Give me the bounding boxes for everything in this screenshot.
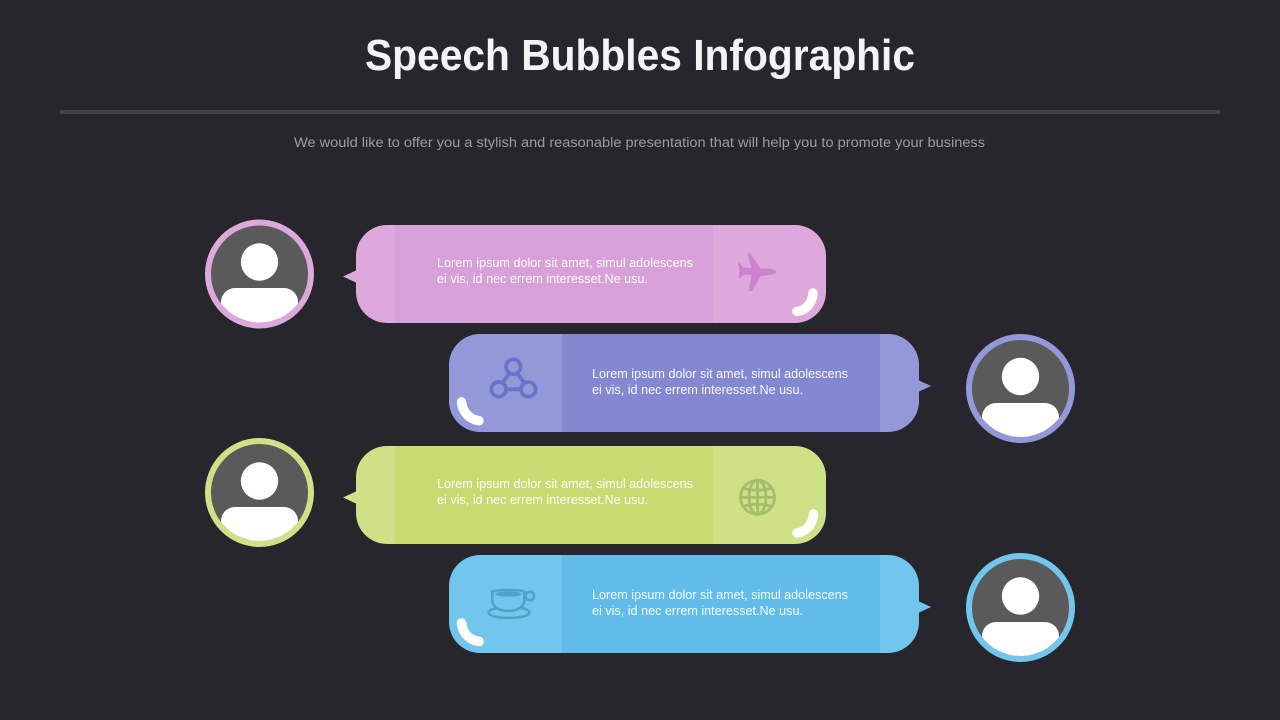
avatar: green [208,441,311,557]
bubble text: blue: ei vis, id nec errem interesset.Ne usu. [592,603,803,618]
subtitle: We would like to offer you a stylish and reasonable presentation that will help you to promote your business [294,135,985,151]
icon: globe [740,480,774,514]
bubble text: blue [592,587,848,618]
bubble text: green: ei vis, id nec errem interesset.Ne usu. [437,492,648,507]
accent hook: purple [462,402,479,421]
bubble text: purple: ei vis, id nec errem interesset.Ne usu. [592,382,803,397]
title: Speech Bubbles Infographic [365,31,915,80]
icon: coffee cup [488,590,534,618]
accent hook: pink [797,293,813,312]
icon: airplane [738,253,776,291]
accent hook: green [797,514,814,533]
speech bubble: blue [449,555,931,653]
avatar: pink [208,222,311,338]
bubble text: green [437,476,693,507]
bubble text: pink: ei vis, id nec errem interesset.Ne usu. [437,271,648,286]
accent hook: blue [462,623,479,642]
bubble text: green: Lorem ipsum dolor sit amet, simul adolescens [437,476,693,491]
bubble text: purple [592,366,848,397]
bubble text: purple: Lorem ipsum dolor sit amet, simul adolescens [592,366,848,381]
speech bubble: purple [449,334,931,432]
avatar: purple [969,337,1072,453]
speech bubble: green [343,446,826,544]
bubble text: pink [437,255,693,286]
avatar: blue [969,556,1072,672]
bubble text: pink: Lorem ipsum dolor sit amet, simul adolescens [437,255,693,270]
icon: network nodes [491,359,536,397]
speech bubble: pink [343,225,826,323]
bubble text: blue: Lorem ipsum dolor sit amet, simul adolescens [592,587,848,602]
